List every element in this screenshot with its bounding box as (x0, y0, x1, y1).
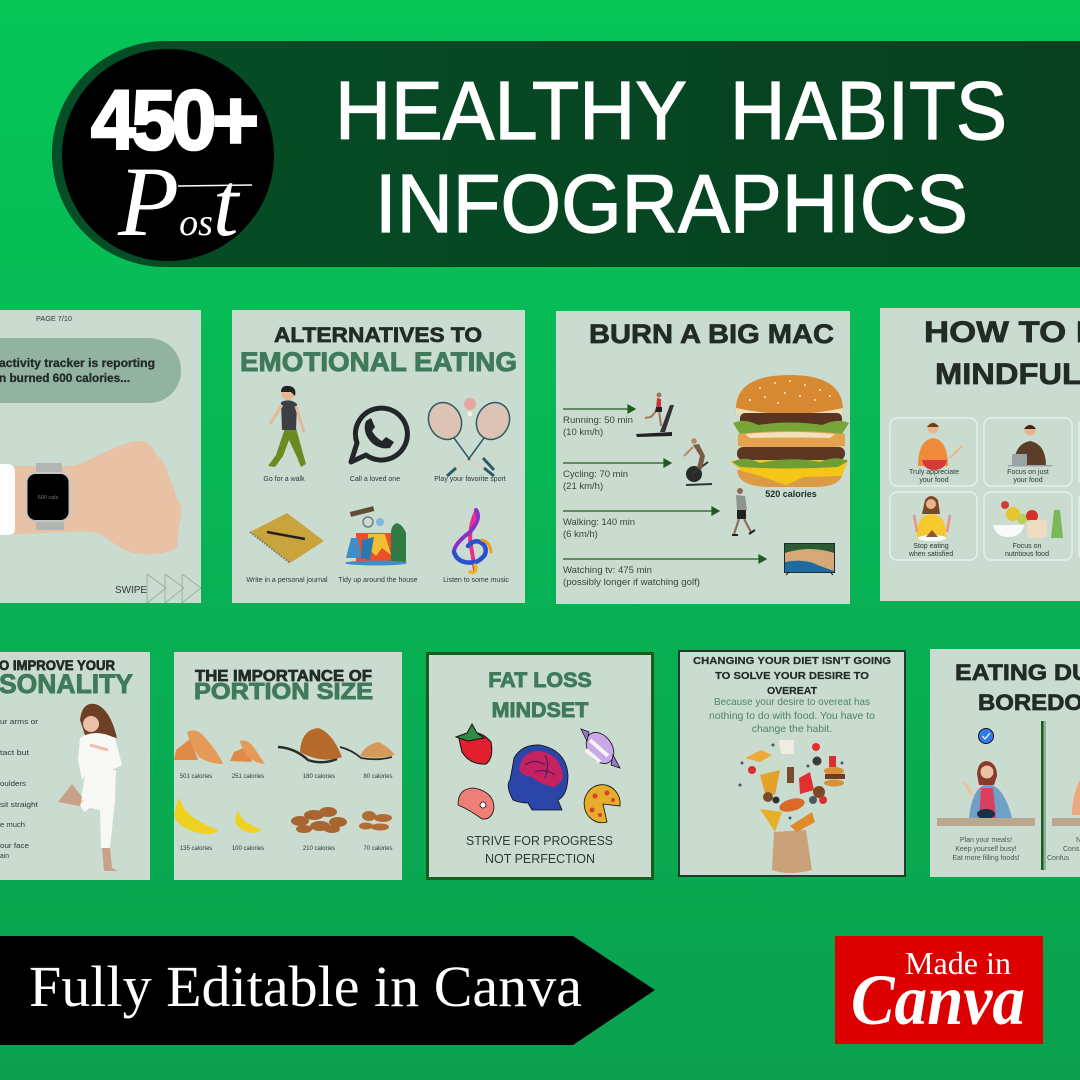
body text: change the habit. (752, 723, 832, 735)
badge: 450+ Post: 450+ (91, 74, 259, 167)
badge: 450+ Post: Post (117, 146, 241, 257)
callout pill: activity tracker is reporting (0, 356, 155, 370)
arrow: running (563, 405, 635, 413)
banner: fully editable in canva (0, 936, 655, 1045)
panel: eating during boredom (930, 649, 1080, 877)
icon: treadmill runner (636, 392, 674, 437)
heading (693, 655, 891, 697)
cycling text: (21 km/h) (563, 481, 603, 492)
heading (0, 660, 134, 694)
heading (926, 320, 1080, 385)
badge: 450+ Post (62, 49, 274, 261)
card: stop eating: when satisfied (908, 551, 953, 558)
icon: badminton rackets (422, 397, 516, 476)
icon: chicken large (174, 730, 223, 764)
labels row 2: 210 calories (303, 846, 335, 852)
labels row 1 (180, 774, 393, 780)
panel: improve your personality (0, 652, 150, 880)
card: stop eating (890, 492, 977, 560)
icon: banana large (174, 799, 218, 834)
labels row 2: 100 calories (232, 846, 264, 852)
watching text (563, 565, 700, 588)
labels row 2: 70 calories (363, 846, 393, 852)
heading: PORTION SIZE (194, 678, 373, 704)
title: HABITS (730, 64, 1007, 157)
heading: MINDSET (492, 698, 588, 722)
heading: OVEREAT (767, 685, 818, 697)
icon: whatsapp phone (351, 408, 407, 462)
icon: cyclist (684, 438, 712, 485)
arrows: swipe chevrons (147, 574, 201, 603)
card: focus on food: Focus on just (1007, 469, 1049, 476)
icon: cleaning supplies (345, 506, 407, 566)
list text: sit straight (0, 800, 39, 809)
heading: FAT LOSS (488, 668, 592, 692)
caption right: Confus (1047, 855, 1070, 862)
page number: PAGE 7/10 (36, 314, 72, 323)
card: truly appreciate: your food (919, 477, 949, 484)
card: truly appreciate (890, 418, 977, 486)
tagline: STRIVE FOR PROGRESS (466, 834, 613, 848)
panel: fat loss mindset (428, 654, 652, 878)
watching text: Watching tv: 475 min (563, 565, 652, 576)
icon: almonds large (291, 807, 347, 833)
arrow: walking (563, 507, 719, 515)
heading (488, 668, 592, 722)
card: focus on food (984, 418, 1072, 486)
body text (709, 696, 875, 735)
labels row 1: 80 calories (363, 774, 393, 780)
heading (956, 664, 1080, 710)
icon: tv (784, 543, 835, 575)
panel: importance of portion size (174, 652, 402, 880)
heading (240, 324, 517, 377)
caption left: Eat more filling foods! (952, 855, 1020, 862)
cycling text: Cycling: 70 min (563, 469, 628, 480)
tagline: NOT PERFECTION (485, 852, 595, 866)
icon: hand with smartwatch (0, 441, 181, 555)
heading: CHANGING YOUR DIET ISN'T GOING (693, 655, 891, 667)
label: Tidy up around the house (338, 577, 418, 584)
heading: O IMPROVE YOUR (0, 658, 115, 673)
list text: oulders (0, 779, 26, 788)
arrow: cycling (563, 459, 671, 467)
cycling text (563, 469, 628, 492)
icon: food burst with paper bag (738, 740, 845, 873)
label: Listen to some music (443, 577, 509, 584)
heading: EATING DU (955, 660, 1080, 685)
banner: fully editable in canva: Fully Editable in Canva (29, 954, 582, 1019)
icon: pizza (584, 785, 620, 823)
panel: activity tracker (0, 310, 201, 603)
heading (194, 668, 373, 704)
panel: how to eat mindfully (880, 308, 1080, 601)
icon: banana small (235, 811, 262, 833)
swipe label: SWIPE (115, 584, 147, 596)
caption left: Keep yourself busy! (955, 846, 1017, 853)
heading: ALTERNATIVES TO (274, 324, 482, 347)
panel: burn a big mac (556, 311, 850, 604)
icon: spoon large (278, 728, 342, 762)
card partial (1079, 492, 1080, 560)
icon: big mac burger (730, 375, 849, 487)
caption left: Plan your meals! (960, 837, 1012, 844)
icon: spoon small (340, 742, 395, 759)
icon: partial person at table (1052, 780, 1080, 826)
badge: made in canva: Canva (851, 960, 1025, 1040)
header banner (52, 41, 1080, 267)
body text: nothing to do with food. You have to (709, 710, 875, 722)
card: nutritious food: Focus on (1013, 543, 1042, 550)
caption right (1047, 837, 1080, 862)
caption left (952, 837, 1020, 862)
icon: walker (732, 488, 755, 535)
label: Write in a personal journal (246, 577, 328, 584)
callout pill: n burned 600 calories... (0, 371, 130, 385)
icon: treble clef (454, 510, 491, 572)
list text: ur arms or (0, 717, 39, 726)
icon: brain head (508, 745, 568, 810)
labels row 2 (180, 846, 393, 852)
icon: candy (580, 727, 620, 769)
title: INFOGRAPHICS (375, 157, 968, 250)
title: HEALTHY (335, 64, 687, 157)
heading: BURN A BIG MAC (589, 319, 834, 349)
list text: our face (0, 841, 29, 850)
badge: made in canva: Made in (905, 945, 1011, 981)
labels row 2: 135 calories (180, 846, 212, 852)
running text: (10 km/h) (563, 427, 603, 438)
running text (563, 415, 633, 438)
card partial (1079, 418, 1080, 486)
callout pill (0, 338, 181, 403)
heading: SONALITY (0, 669, 133, 699)
labels row 1: 180 calories (303, 774, 335, 780)
icon: woman pointing (58, 704, 122, 871)
icon: journal (250, 513, 324, 563)
calories label: 520 calories (765, 489, 817, 499)
list text: ain (0, 851, 9, 860)
panel: changing your diet (679, 651, 905, 876)
card: nutritious food (984, 492, 1072, 560)
icon: blue check (978, 728, 994, 744)
tagline (466, 834, 613, 866)
list text: tact but (0, 748, 30, 757)
card: focus on food: your food (1013, 477, 1043, 484)
watching text: (possibly longer if watching golf) (563, 577, 700, 588)
body text: Because your desire to overeat has (714, 696, 870, 708)
walking text: Walking: 140 min (563, 517, 635, 528)
icon: chicken small (230, 740, 265, 764)
icon: hand with smartwatch: 600 cals (38, 495, 58, 501)
heading: TO SOLVE YOUR DESIRE TO (715, 670, 869, 682)
badge: made in canva (835, 936, 1043, 1044)
caption right: Cons (1063, 846, 1080, 853)
icon: woman at table (937, 761, 1035, 826)
label: Play your favorite sport (434, 476, 506, 483)
label: Go for a walk (263, 476, 305, 483)
heading: BOREDO (978, 690, 1080, 715)
panel: alternatives to emotional eating (232, 310, 525, 603)
icon: walking man (268, 386, 306, 467)
heading: MINDFUL (935, 358, 1080, 391)
icon: meat (458, 788, 494, 819)
divider (1041, 721, 1046, 870)
card: truly appreciate: Truly appreciate (909, 469, 959, 476)
heading: EMOTIONAL EATING (240, 347, 517, 377)
card: nutritious food: nutritious food (1005, 551, 1049, 558)
title (335, 64, 1007, 250)
labels row 1: 501 calories (180, 774, 212, 780)
heading: HOW TO E (924, 316, 1080, 349)
card: stop eating: Stop eating (913, 543, 949, 550)
walking text: (6 km/h) (563, 529, 598, 540)
list text: e much (0, 820, 25, 829)
running text: Running: 50 min (563, 415, 633, 426)
heading: THE IMPORTANCE OF (195, 668, 372, 685)
icon: almonds small (359, 811, 392, 830)
arrow: watching tv (563, 555, 766, 563)
list text (0, 717, 39, 860)
label: Call a loved one (350, 476, 400, 483)
walking text (563, 517, 635, 540)
labels row 1: 251 calories (232, 774, 264, 780)
icon: strawberry (456, 724, 492, 764)
